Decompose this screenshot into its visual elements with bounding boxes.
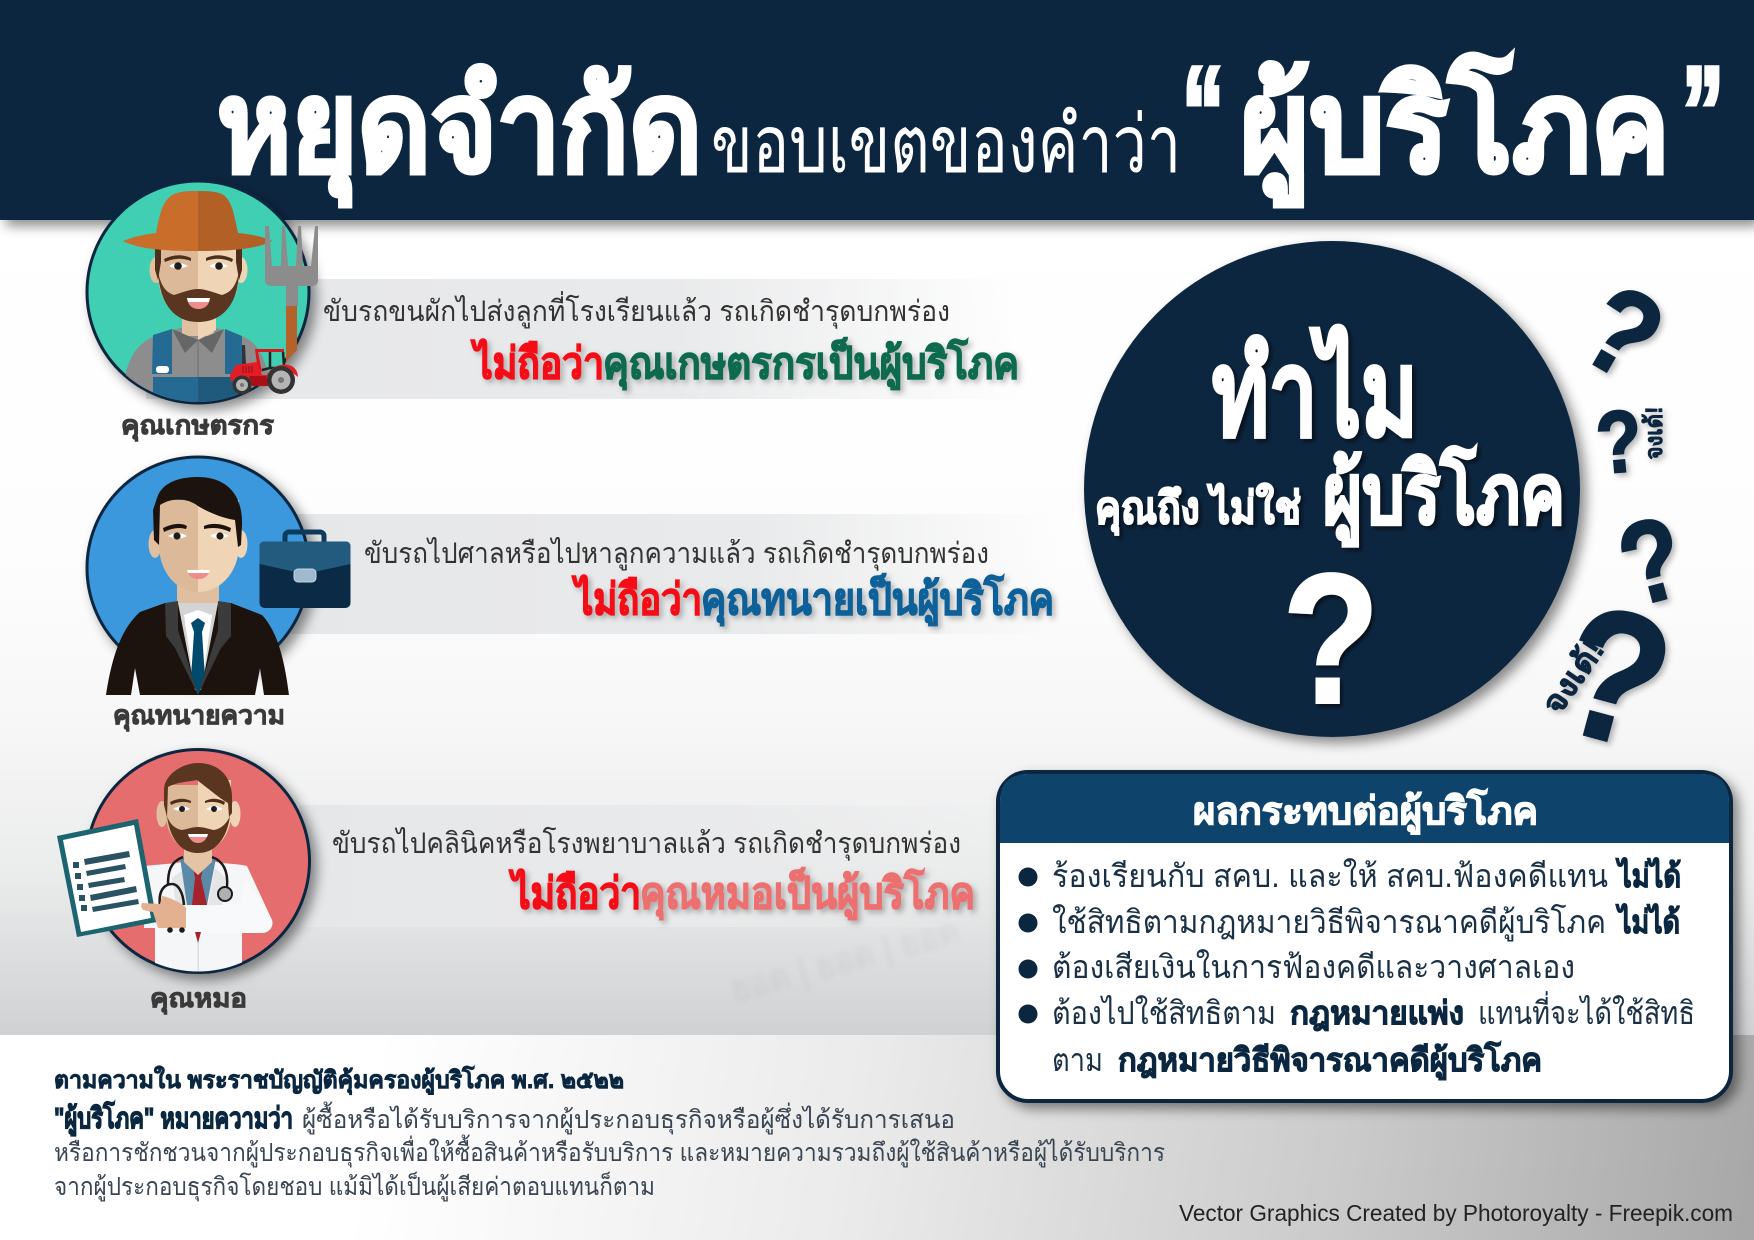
lawyer verdict: ไม่ถือว่า xyxy=(572,574,702,624)
impact list: ร้องเรียนกับ สคบ. และให้ สคบ.ฟ้องคดีแทน xyxy=(1052,858,1608,894)
title: หยุดจำกัด xyxy=(217,56,702,207)
impact list: ต้องไปใช้สิทธิตาม xyxy=(1052,995,1276,1031)
title: ขอบเขตของคำว่า xyxy=(711,100,1181,189)
why subheading: คุณถึง ไม่ใช่ xyxy=(1095,482,1301,536)
icon: briefcase xyxy=(260,532,350,608)
legal definition text: หรือการชักชวนจากผู้ประกอบธุรกิจเพื่อให้ซื้อสินค้าหรือรับบริการ และหมายความรวมถึงผู้ใช้สินค้าหรือผู้ได้รับบริการ xyxy=(54,1134,1165,1168)
panel: why circle xyxy=(1084,241,1580,743)
arm and hand xyxy=(141,880,272,943)
question marks: ? xyxy=(1560,258,1685,408)
impact title: ผลกระทบต่อผู้บริโภค xyxy=(1193,788,1538,835)
question marks xyxy=(1535,258,1697,791)
impact list xyxy=(1018,857,1695,1081)
icon: lawyer xyxy=(87,457,309,695)
farmer verdict: คุณเกษตรกรเป็นผู้บริโภค xyxy=(603,337,1019,391)
farmer label: คุณเกษตรกร xyxy=(121,410,274,442)
icon: doctor xyxy=(57,750,310,980)
lawyer description: ขับรถไปศาลหรือไปหาลูกความแล้ว รถเกิดชำรุดบกพร่อง xyxy=(364,536,989,571)
text bar xyxy=(290,514,1060,634)
impact list: ไม่ได้ xyxy=(1615,903,1680,940)
panel: consumer impact xyxy=(998,772,1731,1101)
text bar xyxy=(300,805,1005,927)
why subheading: ผู้บริโภค xyxy=(1323,446,1565,547)
stethoscope xyxy=(160,857,232,905)
doctor verdict xyxy=(509,867,975,921)
legal definition text: ผู้ซื้อหรือได้รับบริการจากผู้ประกอบธุรกิจหรือผู้ซึ่งได้รับการเสนอ xyxy=(302,1101,955,1135)
doctor description: ขับรถไปคลินิคหรือโรงพยาบาลแล้ว รถเกิดชำรุดบกพร่อง xyxy=(332,826,961,861)
image credit: Vector Graphics Created by Photoroyalty - Freepik.com xyxy=(1179,1200,1733,1226)
why subheading xyxy=(1095,446,1565,547)
impact list: ไม่ได้ xyxy=(1615,857,1681,894)
legal definition text: ตามความใน พระราชบัญญัติคุ้มครองผู้บริโภค พ.ศ. ๒๕๒๒ xyxy=(54,1065,624,1096)
impact list: ใช้สิทธิตามกฎหมายวิธีพิจารณาคดีผู้บริโภค xyxy=(1052,904,1606,942)
impact list: แทนที่จะได้ใช้สิทธิ xyxy=(1478,991,1695,1031)
question marks: ? xyxy=(1592,392,1646,493)
doctor verdict: ไม่ถือว่า xyxy=(509,868,641,918)
impact list: ต้องเสียเงินในการฟ้องคดีและวางศาลเอง xyxy=(1052,949,1575,985)
icon: pitchfork xyxy=(265,226,318,362)
text bar xyxy=(146,279,1026,399)
legal definition text: "ผู้บริโภค" หมายความว่า xyxy=(54,1100,293,1136)
farmer description: ขับรถขนผักไปส่งลูกที่โรงเรียนแล้ว รถเกิดชำรุดบกพร่อง xyxy=(323,291,950,329)
small exclamation text: จงเด้! xyxy=(1641,406,1668,460)
header banner xyxy=(0,0,1754,220)
big question mark: ? xyxy=(1282,535,1380,743)
panel: lawyer scenario xyxy=(87,457,1060,732)
question marks: ? xyxy=(1539,564,1691,791)
question marks: ? xyxy=(1606,491,1697,631)
doctor label: คุณหมอ xyxy=(150,983,247,1015)
background: ยอด | ยอด | ยอด xyxy=(726,910,964,1011)
panel: doctor scenario xyxy=(57,750,1005,1015)
impact list: กฎหมายแพ่ง xyxy=(1290,995,1464,1031)
panel: farmer scenario xyxy=(87,181,1026,442)
icon: farmer xyxy=(87,181,309,403)
farmer verdict: ไม่ถือว่า xyxy=(471,338,604,388)
clipboard xyxy=(57,819,157,937)
title xyxy=(217,41,1724,207)
why heading: ทำไม xyxy=(1212,325,1418,461)
lawyer label: คุณทนายความ xyxy=(113,700,285,732)
impact header xyxy=(1000,774,1729,843)
lawyer verdict: คุณทนายเป็นผู้บริโภค xyxy=(701,573,1054,627)
farmer verdict xyxy=(471,337,1019,391)
legal definition text: จากผู้ประกอบธุรกิจโดยชอบ แม้มิได้เป็นผู้เสียค่าตอบแทนก็ตาม xyxy=(54,1171,655,1202)
impact list: กฎหมายวิธีพิจารณาคดีผู้บริโภค xyxy=(1118,1041,1542,1081)
legal definition text xyxy=(54,1065,1165,1202)
impact list: ตาม xyxy=(1052,1042,1103,1078)
doctor verdict: คุณหมอเป็นผู้บริโภค xyxy=(640,867,975,921)
icon: tractor xyxy=(230,345,298,394)
lawyer verdict xyxy=(572,573,1054,627)
title: ผู้บริโภค xyxy=(1240,52,1670,207)
title: ” xyxy=(1682,41,1724,184)
title: “ xyxy=(1182,41,1224,184)
question marks: จงเด้! xyxy=(1535,633,1611,720)
